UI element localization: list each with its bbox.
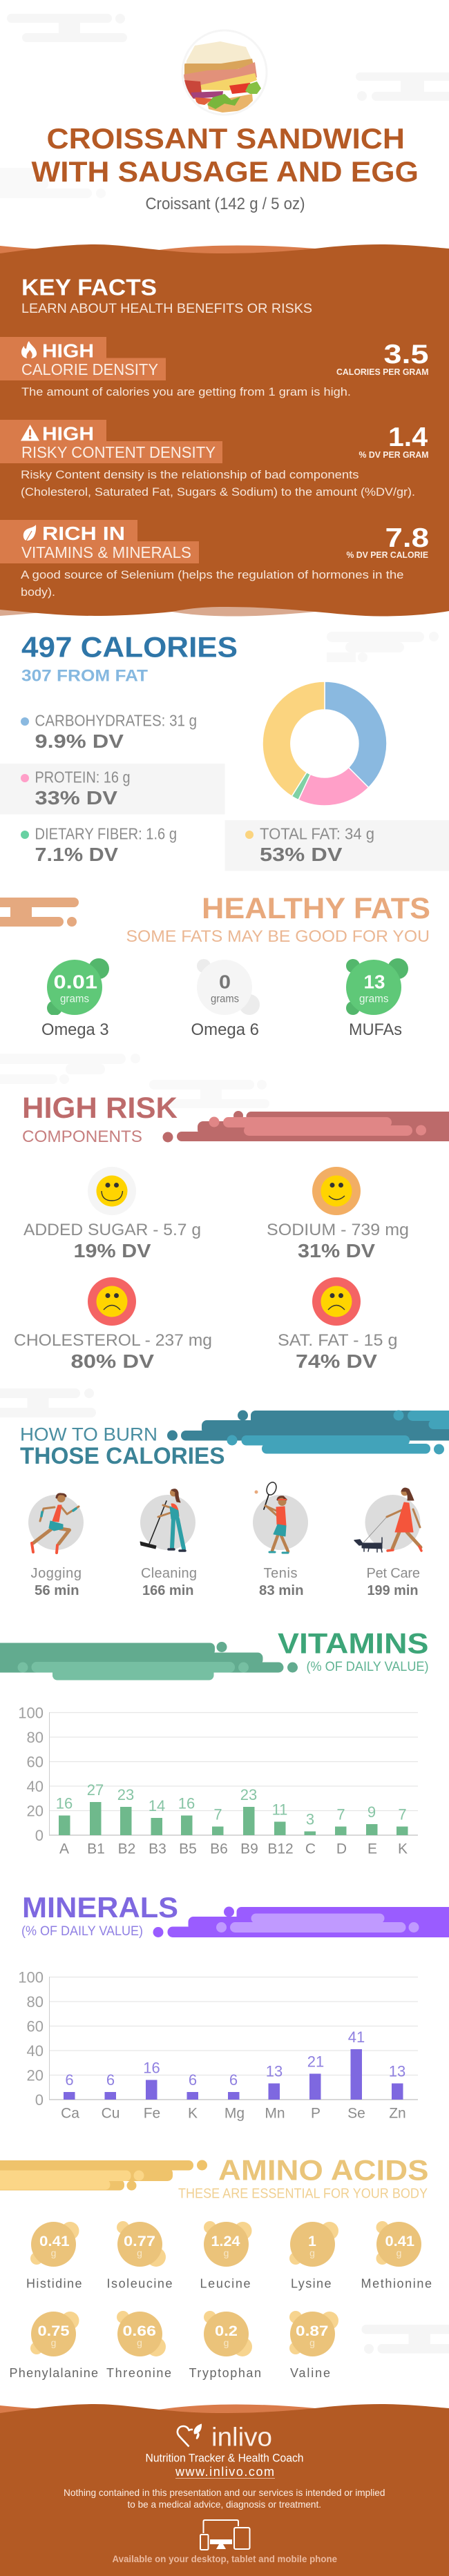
amino: lysine <box>289 2222 338 2291</box>
bar chart: minerals: P <box>311 2106 321 2121</box>
icon: person walking dog <box>354 1488 421 1552</box>
risk: added sugar: 19% DV <box>73 1240 151 1261</box>
stat: omega 6: 0 <box>219 971 231 993</box>
activity: tennis: 83 min <box>259 1583 304 1598</box>
bar chart: vitamins: 0 <box>35 1827 44 1844</box>
activity: jogging: Jogging <box>30 1566 82 1581</box>
fact: calorie density: The amount of calories you are getting from 1 gram is high. <box>21 385 351 398</box>
amino: tryptophan <box>189 2311 261 2380</box>
activity: cleaning: 166 min <box>142 1583 193 1598</box>
icon: person sweeping <box>140 1489 185 1551</box>
logo wordmark: inlivo <box>211 2423 272 2452</box>
high risk heading: HIGH RISK <box>22 1092 178 1125</box>
amino: threonine <box>106 2311 171 2380</box>
legend: dietary fiber: DIETARY FIBER: 1.6 g <box>35 824 177 842</box>
bar chart: minerals: Ca <box>61 2106 79 2121</box>
amino: valine: 0.87 <box>296 2323 329 2339</box>
legend: dietary fiber <box>21 824 177 865</box>
title <box>32 122 419 188</box>
amino: valine: g <box>309 2337 315 2348</box>
activity: jogging <box>28 1494 84 1598</box>
bar chart: minerals: 6 <box>106 2071 115 2089</box>
fact: risky content density: Risky Content density is the relationship of bad components <box>21 468 359 481</box>
decoration: healthy fats ribbon <box>0 898 79 927</box>
legend: total fat: TOTAL FAT: 34 g <box>260 824 374 842</box>
fact: risky content density: % DV PER GRAM <box>359 449 428 460</box>
legend: protein <box>21 768 130 808</box>
burn calories heading <box>20 1424 225 1469</box>
bar chart: minerals: 6 <box>189 2071 197 2089</box>
bar chart: minerals: 0 <box>35 2091 44 2109</box>
amino: methionine: Methionine <box>361 2277 432 2291</box>
activity: pet care: 199 min <box>367 1583 419 1598</box>
stat: omega 6: Omega 6 <box>191 1020 259 1039</box>
risk: saturated fat: 74% DV <box>296 1350 377 1372</box>
availability note: Available on your desktop, tablet and mobile phone <box>112 2553 337 2564</box>
serving size subtitle: Croissant (142 g / 5 oz) <box>145 195 305 213</box>
risk: saturated fat: SAT. FAT - 15 g <box>278 1331 398 1350</box>
burn calories heading: HOW TO BURN <box>20 1424 157 1444</box>
bar chart: vitamins: 60 <box>27 1754 44 1770</box>
bar chart: vitamins: 100 <box>18 1704 44 1722</box>
bar chart: vitamins: 11 <box>272 1801 287 1819</box>
stat: MUFAs <box>346 958 408 1039</box>
bar chart: vitamins: B1 <box>87 1841 105 1857</box>
amino: histidine: Histidine <box>26 2277 82 2291</box>
bar chart: vitamins: 7 <box>398 1806 407 1823</box>
amino: tryptophan: 0.2 <box>215 2323 238 2339</box>
risk: sodium: 31% DV <box>298 1240 375 1261</box>
bar chart: minerals: 21 <box>307 2053 324 2070</box>
bar chart: minerals: 80 <box>27 1993 44 2011</box>
bar chart: minerals: 6 <box>229 2071 238 2089</box>
amino: tryptophan: Tryptophan <box>189 2366 261 2380</box>
fact: calorie density: HIGH <box>42 340 94 362</box>
vitamins heading: VITAMINS <box>278 1627 428 1660</box>
fact: rich in vitamins and minerals: 7.8 <box>385 523 429 553</box>
amino acids subheading: THESE ARE ESSENTIAL FOR YOUR BODY <box>178 2186 428 2201</box>
legend: carbohydrates: CARBOHYDRATES: 31 g <box>35 711 197 729</box>
bar chart: minerals: 100 <box>18 1969 44 1986</box>
key facts subheading: LEARN ABOUT HEALTH BENEFITS OR RISKS <box>21 301 312 316</box>
legend: total fat <box>245 824 374 865</box>
legend: carbohydrates: 9.9% DV <box>35 730 124 752</box>
healthy fats subheading: SOME FATS MAY BE GOOD FOR YOU <box>126 927 430 946</box>
fact: rich in vitamins and minerals <box>0 520 429 599</box>
decoration: high risk ribbon <box>163 1111 449 1142</box>
bar chart: vitamins: B9 <box>240 1841 258 1857</box>
bar chart: minerals: 41 <box>348 2028 365 2046</box>
calories from fat: 307 FROM FAT <box>21 667 148 685</box>
activity: cleaning <box>140 1489 197 1598</box>
disclaimer <box>64 2487 385 2510</box>
fact: calorie density <box>0 337 428 398</box>
panel: footer <box>0 2404 449 2576</box>
icon: sandwich photo <box>182 30 267 115</box>
activity: pet care <box>354 1488 421 1598</box>
bar chart: vitamins: 7 <box>213 1806 222 1823</box>
bar chart: vitamins: 23 <box>240 1786 257 1803</box>
fact: rich in vitamins and minerals: VITAMINS & MINERALS <box>21 543 191 561</box>
amino: leucine: Leucine <box>200 2277 250 2291</box>
disclaimer: Nothing contained in this presentation and our services is intended or implied <box>64 2487 385 2498</box>
amino: threonine: 0.66 <box>123 2323 156 2339</box>
fact: rich in vitamins and minerals: body). <box>21 585 55 599</box>
fact: risky content density: HIGH <box>42 423 94 445</box>
legend: dietary fiber: 7.1% DV <box>35 844 118 865</box>
bar chart: minerals: 13 <box>266 2063 283 2080</box>
activity: cleaning: Cleaning <box>141 1566 197 1581</box>
activity: pet care: Pet Care <box>366 1566 420 1581</box>
amino: isoleucine <box>106 2221 173 2291</box>
risk: cholesterol: CHOLESTEROL - 237 mg <box>14 1331 212 1350</box>
icon: flame <box>21 341 37 358</box>
activity: jogging: 56 min <box>35 1583 79 1598</box>
risk: added sugar: ADDED SUGAR - 5.7 g <box>23 1221 201 1239</box>
amino: isoleucine: 0.77 <box>124 2234 155 2249</box>
stat: MUFAs: grams <box>359 993 388 1005</box>
bar chart: minerals: 20 <box>27 2067 44 2084</box>
legend: total fat: 53% DV <box>260 844 343 865</box>
bar chart: minerals: 60 <box>27 2017 44 2035</box>
bar chart: minerals: 6 <box>65 2071 74 2089</box>
bar chart: vitamins: 20 <box>27 1802 44 1820</box>
amino acids heading: AMINO ACIDS <box>218 2154 428 2186</box>
risk: added sugar <box>23 1167 201 1261</box>
bar chart: vitamins: 9 <box>367 1803 376 1821</box>
bar chart: vitamins: 16 <box>56 1795 73 1812</box>
amino: histidine: 0.41 <box>39 2234 70 2249</box>
amino: lysine: Lysine <box>291 2277 332 2291</box>
bar chart: vitamins: C <box>305 1841 316 1857</box>
bar chart: minerals: Fe <box>144 2106 160 2121</box>
vitamins subheading: (% OF DAILY VALUE) <box>307 1660 428 1674</box>
risk: cholesterol <box>14 1277 212 1372</box>
amino: leucine: g <box>224 2247 229 2258</box>
bar chart: minerals: Se <box>347 2106 365 2121</box>
bar chart: vitamins: 27 <box>87 1781 104 1799</box>
risk: sodium <box>267 1167 409 1261</box>
bar chart: vitamins: 3 <box>306 1810 314 1828</box>
stat: omega 3: grams <box>60 993 89 1005</box>
bar chart: vitamins: B5 <box>179 1841 197 1857</box>
burn calories heading: THOSE CALORIES <box>20 1443 225 1469</box>
stat: omega 6: grams <box>211 993 239 1005</box>
amino: phenylalanine <box>10 2312 98 2380</box>
bar chart: vitamins: B12 <box>267 1841 294 1857</box>
amino: valine <box>289 2311 338 2380</box>
icon: devices <box>200 2520 250 2550</box>
amino: leucine <box>200 2221 251 2291</box>
fact: calorie density: CALORIE DENSITY <box>21 360 158 378</box>
bar chart: vitamins: B2 <box>118 1841 135 1857</box>
fact: risky content density: (Cholesterol, Saturated Fat, Sugars & Sodium) to the amount (%DV/gr). <box>21 485 415 498</box>
icon: inlivo heart logo <box>178 2423 202 2447</box>
stat: omega 6 <box>191 959 260 1039</box>
bar chart: minerals: 40 <box>27 2042 44 2060</box>
amino: methionine: g <box>397 2247 401 2258</box>
icon: leaf <box>23 525 36 541</box>
bar chart: minerals: Mn <box>265 2106 285 2121</box>
amino: threonine: g <box>137 2337 142 2348</box>
bar chart: vitamins: 14 <box>149 1797 165 1814</box>
decoration: burn calories ribbon <box>167 1410 449 1454</box>
title: CROISSANT SANDWICH <box>47 122 405 155</box>
macro legend <box>0 711 449 871</box>
high risk subheading: COMPONENTS <box>22 1127 142 1146</box>
bar chart: vitamins: 23 <box>117 1786 134 1803</box>
amino: threonine: Threonine <box>106 2366 171 2380</box>
decoration: amino acids ribbon <box>0 2160 207 2190</box>
icon: jogger <box>32 1494 79 1553</box>
donut chart <box>262 681 387 806</box>
title: WITH SAUSAGE AND EGG <box>32 155 419 188</box>
minerals heading: MINERALS <box>22 1891 178 1924</box>
decoration: vitamins ribbon <box>0 1642 298 1681</box>
amino: leucine: 1.24 <box>211 2234 240 2249</box>
bar chart: vitamins <box>18 1704 418 1857</box>
risk: saturated fat <box>278 1277 398 1372</box>
fact: risky content density: RISKY CONTENT DENSITY <box>21 443 216 461</box>
bar chart: vitamins: E <box>367 1841 377 1857</box>
stat: omega 3 <box>41 958 109 1039</box>
bar chart: minerals: 13 <box>389 2063 405 2080</box>
risk: cholesterol: 80% DV <box>70 1350 154 1372</box>
website link: www.inlivo.com <box>175 2465 274 2479</box>
bar chart: vitamins: B3 <box>149 1841 166 1857</box>
amino: phenylalanine: Phenylalanine <box>10 2366 98 2380</box>
key facts heading: KEY FACTS <box>21 275 157 300</box>
bar chart: vitamins: 7 <box>336 1806 345 1823</box>
fact: calorie density: 3.5 <box>384 340 428 369</box>
decoration: minerals ribbon <box>153 1907 449 1937</box>
disclaimer: to be a medical advice, diagnosis or treatment. <box>127 2499 321 2510</box>
amino: methionine: 0.41 <box>385 2234 414 2249</box>
bar chart: vitamins: A <box>59 1841 69 1857</box>
fact: rich in vitamins and minerals: RICH IN <box>42 523 125 544</box>
amino: methionine <box>361 2221 432 2291</box>
risk: sodium: SODIUM - 739 mg <box>267 1221 409 1239</box>
fact: rich in vitamins and minerals: A good source of Selenium (helps the regulation of hormones in the <box>21 568 403 581</box>
amino: lysine: 1 <box>308 2234 316 2249</box>
calories heading: 497 CALORIES <box>21 631 238 663</box>
minerals subheading: (% OF DAILY VALUE) <box>21 1924 143 1939</box>
legend: protein: PROTEIN: 16 g <box>35 768 130 786</box>
amino: tryptophan: g <box>224 2337 229 2348</box>
amino: valine: Valine <box>290 2366 330 2380</box>
bar chart: vitamins: B6 <box>210 1841 228 1857</box>
amino: isoleucine: g <box>137 2247 142 2258</box>
bar chart: minerals: Mg <box>224 2106 245 2121</box>
fact: risky content density: 1.4 <box>388 423 428 452</box>
bar chart: vitamins: 80 <box>27 1729 44 1746</box>
bar chart: minerals: K <box>188 2106 198 2121</box>
activity: tennis <box>253 1481 308 1598</box>
amino: histidine <box>26 2222 82 2291</box>
bar chart: minerals: Cu <box>102 2106 120 2121</box>
stat: omega 3: Omega 3 <box>41 1020 109 1039</box>
amino: phenylalanine: g <box>51 2337 56 2348</box>
fact: calorie density: CALORIES PER GRAM <box>336 367 428 377</box>
amino: lysine: g <box>309 2247 315 2258</box>
amino: phenylalanine: 0.75 <box>37 2323 70 2339</box>
icon: warning triangle <box>21 425 39 440</box>
legend: carbohydrates <box>21 711 197 752</box>
bar chart: minerals <box>18 1969 418 2121</box>
tagline: Nutrition Tracker & Health Coach <box>145 2452 304 2465</box>
bar chart: vitamins: 16 <box>178 1795 195 1812</box>
stat: omega 3: 0.01 <box>54 971 97 993</box>
legend: protein: 33% DV <box>35 787 117 808</box>
bar chart: vitamins: 40 <box>27 1778 44 1795</box>
activity: tennis: Tenis <box>264 1566 297 1581</box>
bar chart: minerals: Zn <box>389 2106 406 2121</box>
bar chart: vitamins: K <box>398 1841 408 1857</box>
stat: MUFAs: MUFAs <box>349 1020 402 1039</box>
healthy fats heading: HEALTHY FATS <box>202 892 430 925</box>
amino: isoleucine: Isoleucine <box>106 2277 173 2291</box>
amino: histidine: g <box>51 2247 56 2258</box>
panel: key facts <box>0 244 449 616</box>
icon: tennis player <box>254 1481 288 1553</box>
stat: MUFAs: 13 <box>363 971 385 993</box>
fact: rich in vitamins and minerals: % DV PER CALORIE <box>347 550 428 560</box>
bar chart: minerals: 16 <box>143 2059 160 2077</box>
bar chart: vitamins: D <box>336 1841 347 1857</box>
fact: risky content density <box>0 420 428 498</box>
